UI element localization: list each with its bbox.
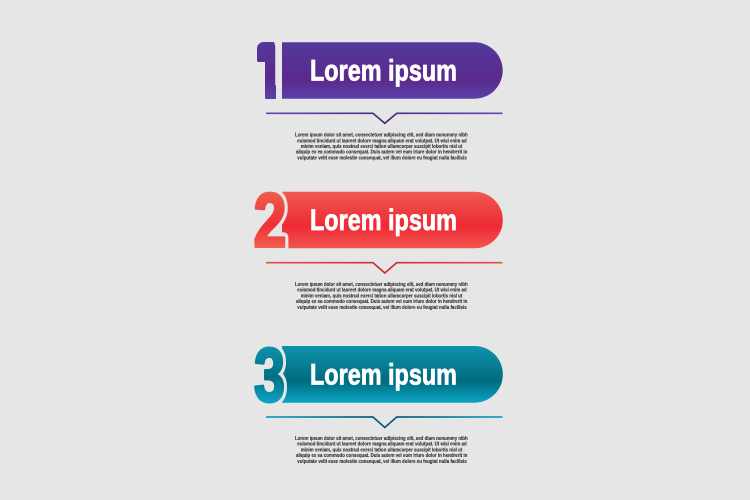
banner: step 2 — [282, 192, 503, 248]
banner: step 3 — [282, 346, 503, 403]
number 1: 1 — [251, 31, 281, 116]
body text: step 1: aliquip ex ea commodo consequat. Duis autem vel eum iriure dolor in hendrerit in — [296, 150, 467, 156]
body text: step 1: vulputate velit esse molestie consequat, vel illum dolore eu feugiat nulla facilisis — [297, 155, 467, 161]
body text: step 3: Lorem ipsum dolor sit amet, consectetuer adipiscing elit, sed diam nonummy nibh — [295, 436, 468, 442]
number 2: 2 — [254, 178, 286, 264]
number 3: 3 — [254, 333, 285, 418]
number 3: 3 — [254, 333, 285, 418]
heading: step 2: Lorem ipsum — [310, 204, 457, 237]
body text: step 2: aliquip ex ea commodo consequat. Duis autem vel eum iriure dolor in hendrerit in — [296, 299, 467, 305]
panel: step 1 — [257, 42, 503, 160]
number 2: 2 — [254, 178, 286, 264]
body text: step 2: euismod tincidunt ut laoreet dolore magna aliquam erat volutpat. Ut wisi enim ad — [297, 288, 467, 294]
panel: step 3 — [254, 333, 503, 465]
body text: step 3: euismod tincidunt ut laoreet dolore magna aliquam erat volutpat. Ut wisi enim ad — [297, 442, 467, 448]
body text: step 1: euismod tincidunt ut laoreet dolore magna aliquam erat volutpat. Ut wisi enim ad — [297, 138, 467, 144]
pointer line: step 2 — [266, 263, 502, 273]
body text: step 1: Lorem ipsum dolor sit amet, consectetuer adipiscing elit, sed diam nonummy nibh — [295, 133, 468, 139]
heading: step 3: Lorem ipsum — [310, 359, 457, 392]
banner: step 1 — [282, 42, 503, 99]
pointer line: step 3 — [266, 417, 502, 428]
panel: step 2 — [254, 178, 503, 311]
body text: step 3 — [295, 436, 468, 465]
body text: step 3: minim veniam, quis nostrud exerci tation ullamcorper suscipit lobortis nisl ut — [301, 447, 463, 453]
body text: step 3: vulputate velit esse molestie consequat, vel illum dolore eu feugiat nulla facilisis — [297, 459, 467, 465]
body text: step 1: minim veniam, quis nostrud exerci tation ullamcorper suscipit lobortis nisl ut — [301, 144, 463, 150]
body text: step 2 — [295, 282, 468, 311]
body text: step 2: minim veniam, quis nostrud exerci tation ullamcorper suscipit lobortis nisl ut — [301, 293, 463, 299]
heading: step 1: Lorem ipsum — [310, 55, 457, 88]
body text: step 1 — [295, 133, 468, 161]
body text: step 3: aliquip ex ea commodo consequat. Duis autem vel eum iriure dolor in hendrerit in — [296, 453, 467, 459]
pointer line: step 1 — [266, 113, 502, 123]
body text: step 2: Lorem ipsum dolor sit amet, consectetuer adipiscing elit, sed diam nonummy nibh — [295, 282, 468, 288]
body text: step 2: vulputate velit esse molestie consequat, vel illum dolore eu feugiat nulla facilisis — [297, 305, 467, 311]
